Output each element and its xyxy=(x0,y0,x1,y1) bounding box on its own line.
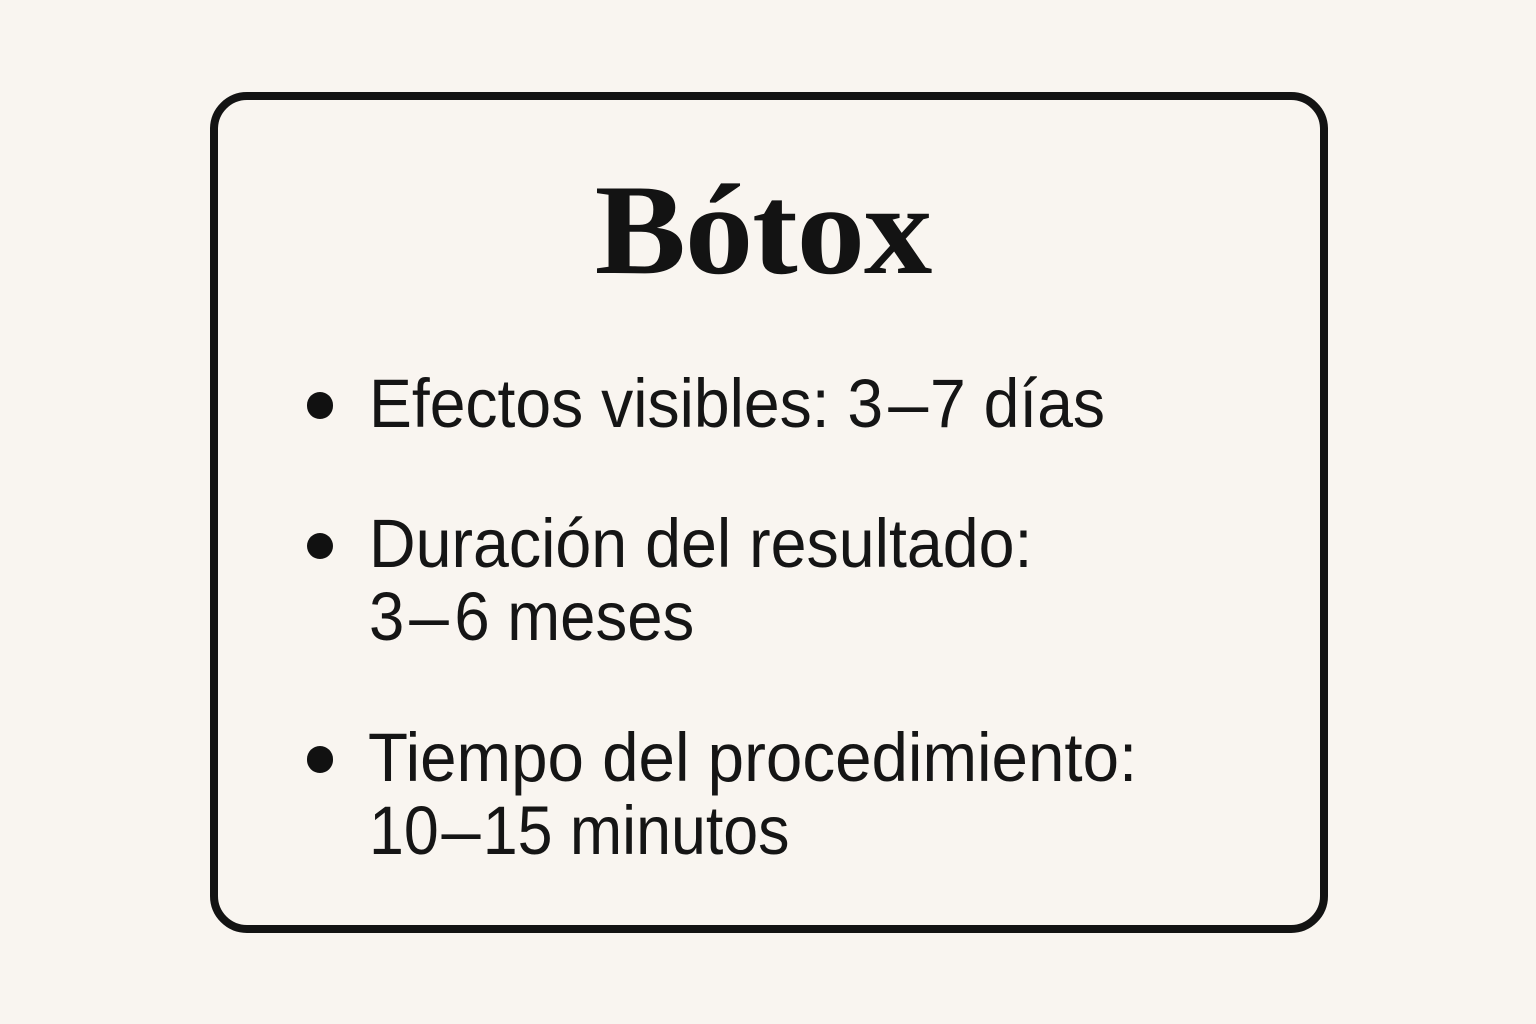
bullet 3 dot xyxy=(306,746,333,772)
bullet 3 text: – xyxy=(441,792,480,868)
bullet 1 text: – xyxy=(888,365,928,442)
bullet 3 text: Tiempo del procedimiento: xyxy=(368,719,1137,796)
bullet 2 text xyxy=(369,505,1032,654)
bullet 2 text: – xyxy=(410,578,449,654)
bullet 1 dot xyxy=(306,392,333,418)
title: Bótox xyxy=(595,158,931,301)
bullet 1 text: Efectos visibles: 3 7 días xyxy=(369,365,1105,442)
bullet 2 dot xyxy=(306,532,333,559)
panel: card border xyxy=(210,92,1328,933)
bullet 3 text: 10 15 minutos xyxy=(369,792,790,868)
bullet 2 text: Duración del resultado: xyxy=(369,505,1032,582)
bullet 3 text xyxy=(368,719,1137,868)
bullet 2 text: 3 6 meses xyxy=(369,578,694,654)
